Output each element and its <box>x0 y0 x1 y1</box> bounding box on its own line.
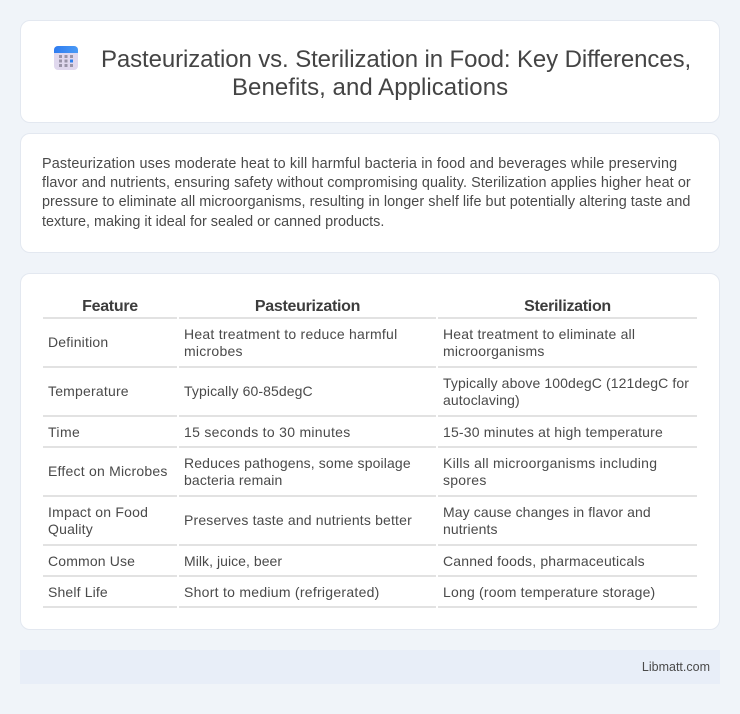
table header <box>82 298 611 315</box>
row: temperature: autoclaving) <box>443 392 520 408</box>
row: temperature: Temperature <box>48 383 129 399</box>
panel: summary text <box>20 133 720 253</box>
text block: summary: flavor and nutrients, ensuring safety without compromising quality. Sterilization applies higher heat or <box>42 175 691 191</box>
row: impact on food quality: Quality <box>48 521 93 537</box>
panel: comparison table <box>20 273 720 630</box>
row: time: Time <box>48 424 80 440</box>
row: effect on microbes <box>48 455 657 488</box>
row: temperature: Typically 60-85degC <box>184 383 313 399</box>
row: time: 15-30 minutes at high temperature <box>443 424 663 440</box>
panel: header <box>20 20 720 123</box>
row: effect on microbes: Kills all microorganisms including <box>443 455 657 471</box>
text block: summary <box>42 156 691 230</box>
row: shelf life: Long (room temperature storage) <box>443 584 655 600</box>
title <box>101 46 691 101</box>
row: definition <box>48 326 635 359</box>
row: effect on microbes: bacteria remain <box>184 472 282 488</box>
table header: Pasteurization <box>255 298 360 315</box>
row: common use: Canned foods, pharmaceuticals <box>443 553 645 569</box>
row: definition: microorganisms <box>443 343 545 359</box>
row: definition: Heat treatment to reduce harmful <box>184 326 397 342</box>
row: impact on food quality: Preserves taste and nutrients better <box>184 512 412 528</box>
row: shelf life <box>48 584 655 600</box>
row: effect on microbes: Reduces pathogens, some spoilage <box>184 455 411 471</box>
table header: Feature <box>82 298 138 315</box>
title: Benefits, and Applications <box>232 74 508 101</box>
row: shelf life: Short to medium (refrigerated) <box>184 584 380 600</box>
row: time <box>48 424 663 440</box>
icon: calendar <box>54 46 78 70</box>
row: temperature: Typically above 100degC (121degC for <box>443 375 689 391</box>
row: impact on food quality: May cause changes in flavor and <box>443 504 651 520</box>
text block: summary: pressure to eliminate all microorganisms, resulting in longer shelf life but potentially altering taste and <box>42 194 690 210</box>
title: Pasteurization vs. Sterilization in Food: Key Differences, <box>101 46 691 73</box>
row: shelf life: Shelf Life <box>48 584 108 600</box>
row: common use <box>48 553 645 569</box>
row: definition: Definition <box>48 334 108 350</box>
row: time: 15 seconds to 30 minutes <box>184 424 351 440</box>
row: effect on microbes: Effect on Microbes <box>48 463 168 479</box>
row: impact on food quality: nutrients <box>443 521 498 537</box>
footer bar <box>20 650 720 684</box>
row: definition: microbes <box>184 343 243 359</box>
row: common use: Milk, juice, beer <box>184 553 282 569</box>
text block: summary: Pasteurization uses moderate heat to kill harmful bacteria in food and beverages while preserving <box>42 156 677 172</box>
row: common use: Common Use <box>48 553 135 569</box>
row: impact on food quality: Impact on Food <box>48 504 148 520</box>
row: temperature <box>48 375 689 408</box>
row: impact on food quality <box>48 504 651 537</box>
text block: summary: texture, making it ideal for sealed or canned products. <box>42 214 384 230</box>
table header: Sterilization <box>524 298 611 315</box>
row: effect on microbes: spores <box>443 472 487 488</box>
footer credit: Libmatt.com <box>642 660 710 674</box>
row: definition: Heat treatment to eliminate all <box>443 326 635 342</box>
